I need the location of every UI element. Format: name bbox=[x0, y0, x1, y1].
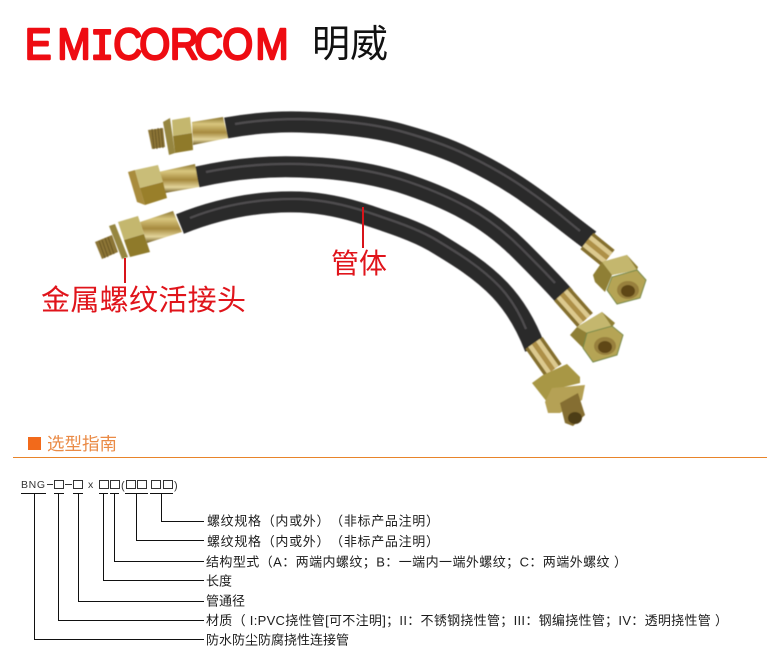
section heading: selection guide: 选型指南 bbox=[47, 434, 117, 454]
left fitting bbox=[148, 128, 165, 149]
brand chinese name: 明威 bbox=[312, 24, 388, 66]
hose: top bbox=[148, 117, 646, 304]
leader lines bbox=[21, 494, 204, 640]
callout: metal threaded union: 金属螺纹活接头 bbox=[41, 284, 246, 317]
section heading: selection guide bbox=[13, 434, 767, 458]
spec labels: 结构型式（A：两端内螺纹；B：一端内一端外螺纹；C：两端外螺纹 ） bbox=[206, 554, 627, 570]
hose: bottom bbox=[95, 199, 585, 426]
brand name: EM bbox=[25, 19, 90, 68]
left fitting bbox=[128, 170, 145, 205]
model code diagram bbox=[21, 479, 728, 648]
hose: middle bbox=[128, 164, 623, 362]
title bbox=[25, 19, 388, 73]
brand name: I bbox=[90, 22, 114, 73]
model code: ) bbox=[174, 480, 178, 492]
spec labels: 长度 bbox=[206, 574, 232, 588]
model code: x bbox=[88, 479, 94, 491]
spec labels: 管通径 bbox=[206, 594, 245, 608]
callout: hose body bbox=[331, 207, 387, 279]
spec labels: 螺纹规格（内或外）（非标产品注明） bbox=[207, 534, 439, 549]
brand name: CORCOM bbox=[113, 19, 288, 68]
spec labels: 螺纹规格（内或外）（非标产品注明） bbox=[207, 514, 439, 528]
spec labels: 防水防尘防腐挠性连接管 bbox=[206, 632, 349, 648]
spec labels: 材质（ I:PVC挠性管[可不注明]；II：不锈钢挠性管；III：钢编挠性管；IV：透明挠性管 ） bbox=[206, 613, 728, 629]
right fitting bbox=[587, 241, 608, 258]
right fitting bbox=[562, 294, 585, 320]
spec labels bbox=[206, 514, 728, 648]
model code: BNG bbox=[21, 479, 45, 491]
model code: ( bbox=[121, 480, 125, 492]
left fitting bbox=[95, 235, 118, 259]
product photo: three hoses bbox=[95, 117, 646, 426]
model code bbox=[21, 479, 178, 492]
callout: hose body: 管体 bbox=[331, 248, 387, 279]
right fitting bbox=[534, 343, 553, 370]
